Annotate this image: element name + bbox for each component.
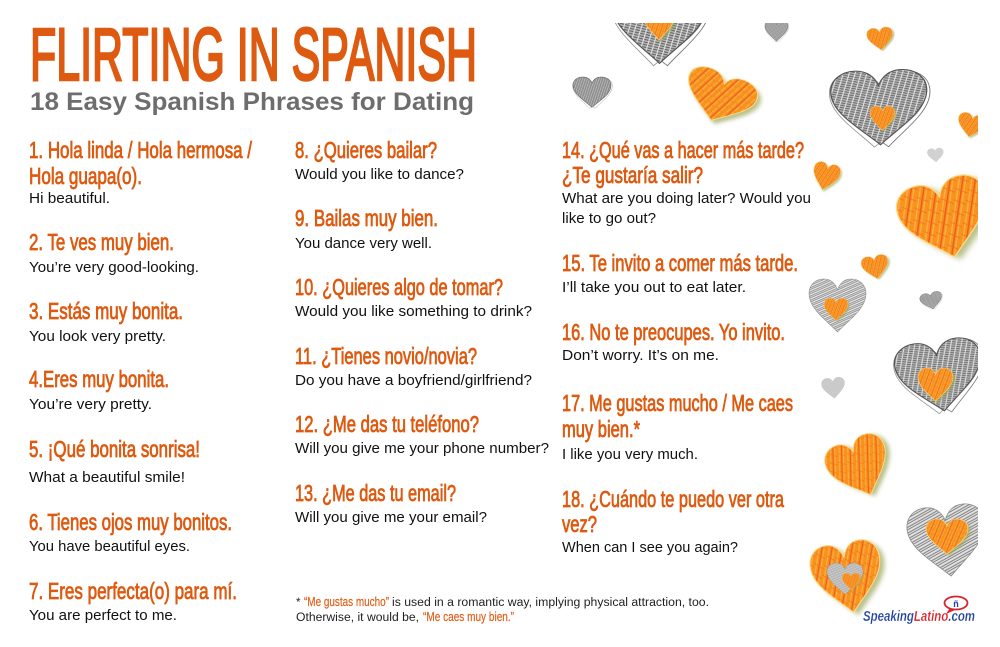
phrase 4 bbox=[29, 366, 169, 413]
phrase 12: 12. ¿Me das tu teléfono? bbox=[295, 411, 479, 437]
heart: small orange centre bbox=[860, 254, 891, 280]
phrase 9 bbox=[295, 205, 438, 252]
logo: SpeakingLatino.com bbox=[863, 596, 975, 625]
panel: column 3 phrases bbox=[562, 137, 811, 556]
phrase 4: You’re very pretty. bbox=[29, 397, 152, 413]
phrase 1 bbox=[29, 137, 252, 207]
phrase 14: 14. ¿Qué vas a hacer más tarde? bbox=[562, 137, 804, 163]
heart: grey hatch lower with orange centre bbox=[906, 504, 978, 576]
phrase 7: You are perfect to me. bbox=[29, 608, 177, 624]
heart: grey top with orange centre bbox=[615, 23, 706, 66]
phrase 7 bbox=[29, 578, 237, 624]
phrase 10: Would you like something to drink? bbox=[295, 304, 532, 320]
footnote: * bbox=[296, 597, 301, 609]
phrase 18: vez? bbox=[562, 511, 597, 537]
heart: large orange right bbox=[896, 174, 978, 262]
phrase 6: You have beautiful eyes. bbox=[29, 539, 190, 555]
heart: small dark top bbox=[764, 23, 789, 42]
title: FLIRTING IN SPANISH bbox=[30, 13, 477, 96]
heart: small orange top right bbox=[866, 26, 896, 53]
phrase 12 bbox=[295, 411, 549, 457]
phrase 14: What are you doing later? Would you bbox=[562, 191, 811, 207]
phrase 3: 3. Estás muy bonita. bbox=[29, 298, 183, 324]
footnote: “Me gustas mucho” bbox=[304, 595, 389, 609]
phrase 1: Hola guapa(o). bbox=[29, 163, 142, 189]
phrase 1: Hi beautiful. bbox=[29, 191, 110, 207]
phrase 1: 1. Hola linda / Hola hermosa / bbox=[29, 137, 252, 163]
heart: grey hatch with orange centre bbox=[809, 279, 866, 332]
heart: orange with grey centre bbox=[809, 539, 888, 618]
logo speech bubble: ñ bbox=[953, 599, 959, 609]
phrase 5: What a beautiful smile! bbox=[29, 470, 185, 486]
heart: large dark scribble bbox=[829, 69, 930, 148]
phrase 18 bbox=[562, 486, 784, 556]
phrase 6: 6. Tienes ojos muy bonitos. bbox=[29, 509, 232, 535]
logo: SpeakingLatino.com: SpeakingLatino.com bbox=[863, 608, 975, 625]
phrase 11: 11. ¿Tienes novio/novia? bbox=[295, 343, 477, 369]
phrase 8 bbox=[295, 137, 464, 183]
phrase 10: 10. ¿Quieres algo de tomar? bbox=[295, 274, 503, 300]
heart: small orange middle bbox=[814, 161, 844, 192]
phrase 4: 4.Eres muy bonita. bbox=[29, 366, 169, 392]
heart: small dark left bbox=[571, 77, 614, 109]
heart: tiny light grey bbox=[927, 148, 944, 163]
heart: tiny grey lower bbox=[821, 377, 846, 399]
subtitle: 18 Easy Spanish Phrases for Dating bbox=[30, 88, 474, 116]
phrase 15 bbox=[562, 250, 798, 296]
heart: orange lower bbox=[824, 432, 893, 498]
footnote: Otherwise, it would be, bbox=[296, 612, 419, 624]
phrase 8: Would you like to dance? bbox=[295, 167, 464, 183]
phrase 2: You’re very good-looking. bbox=[29, 260, 199, 276]
phrase 13: Will you give me your email? bbox=[295, 510, 487, 526]
phrase 9: You dance very well. bbox=[295, 236, 432, 252]
heart: small dark right bbox=[920, 291, 943, 310]
phrase 11: Do you have a boyfriend/girlfriend? bbox=[295, 373, 532, 389]
phrase 2 bbox=[29, 229, 199, 276]
phrase 14: ¿Te gustaría salir? bbox=[562, 162, 703, 188]
phrase 16 bbox=[562, 319, 785, 364]
phrase 18: 18. ¿Cuándo te puedo ver otra bbox=[562, 486, 784, 512]
heart: large orange top bbox=[688, 66, 764, 126]
phrase 17: I like you very much. bbox=[562, 447, 698, 463]
phrase 9: 9. Bailas muy bien. bbox=[295, 205, 438, 231]
phrase 3: You look very pretty. bbox=[29, 329, 166, 345]
phrase 16: 16. No te preocupes. Yo invito. bbox=[562, 319, 785, 345]
panel: column 1 phrases bbox=[29, 137, 252, 624]
phrase 6 bbox=[29, 509, 232, 555]
heart: orange clipped right bbox=[958, 112, 978, 139]
phrase 18: When can I see you again? bbox=[562, 540, 738, 556]
phrase 5 bbox=[29, 436, 200, 486]
phrase 11 bbox=[295, 343, 532, 389]
panel: heart decorations bbox=[571, 0, 1000, 622]
phrase 14 bbox=[562, 137, 811, 227]
phrase 17: muy bien.* bbox=[562, 416, 640, 442]
phrase 8: 8. ¿Quieres bailar? bbox=[295, 137, 437, 163]
phrase 5: 5. ¡Qué bonita sonrisa! bbox=[29, 436, 200, 462]
phrase 7: 7. Eres perfecta(o) para mí. bbox=[29, 578, 237, 604]
phrase 16: Don’t worry. It’s on me. bbox=[562, 348, 719, 364]
phrase 3 bbox=[29, 298, 183, 345]
phrase 17 bbox=[562, 390, 793, 463]
phrase 17: 17. Me gustas mucho / Me caes bbox=[562, 390, 793, 416]
panel: column 2 phrases bbox=[295, 137, 549, 526]
phrase 12: Will you give me your phone number? bbox=[295, 441, 549, 457]
phrase 14: like to go out? bbox=[562, 211, 656, 227]
phrase 2: 2. Te ves muy bien. bbox=[29, 229, 174, 255]
phrase 15: I’ll take you out to eat later. bbox=[562, 280, 746, 296]
phrase 10 bbox=[295, 274, 532, 320]
footnote: is used in a romantic way, implying physical attraction, too. bbox=[392, 597, 709, 609]
footnote bbox=[296, 595, 709, 624]
phrase 13: 13. ¿Me das tu email? bbox=[295, 480, 456, 506]
phrase 15: 15. Te invito a comer más tarde. bbox=[562, 250, 798, 276]
heart: dark scribble with orange centre bbox=[893, 337, 978, 414]
phrase 13 bbox=[295, 480, 487, 526]
footnote: “Me caes muy bien.” bbox=[423, 610, 514, 624]
